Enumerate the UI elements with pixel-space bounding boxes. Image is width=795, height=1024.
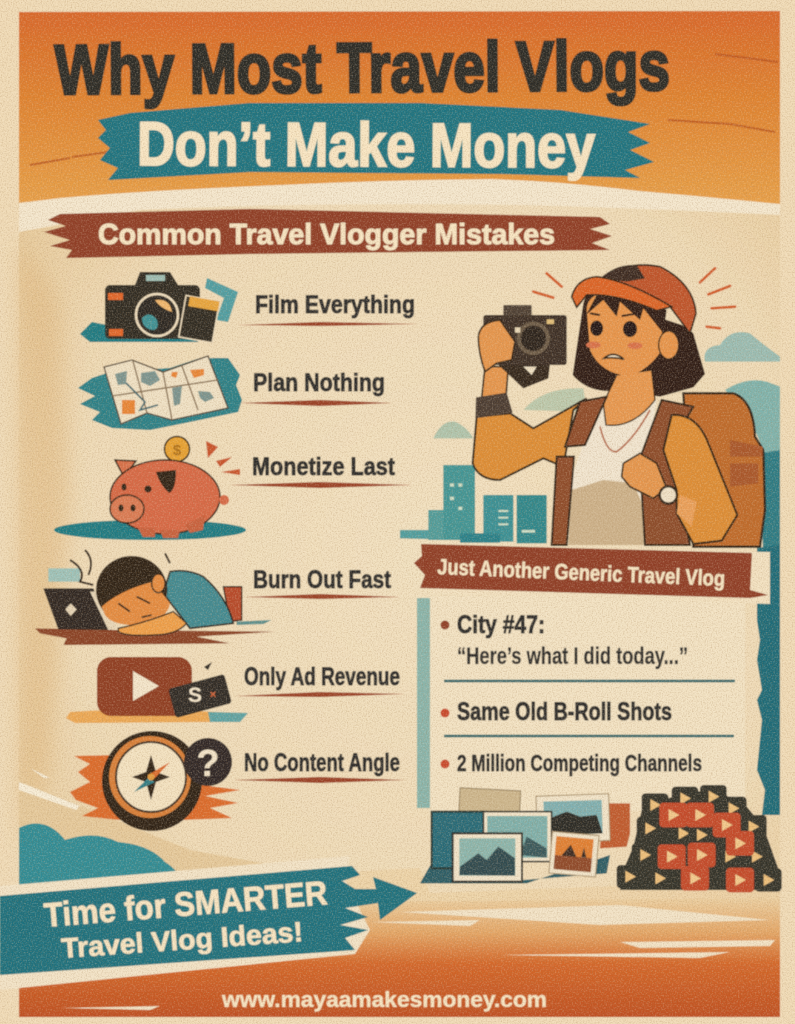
- illustration: frustrated traveler with camera: [400, 265, 780, 560]
- backpack: [683, 393, 765, 547]
- photo and video pile: [420, 785, 782, 892]
- clouds: [433, 332, 780, 560]
- icon: ad revenue play button: ×: [210, 689, 216, 701]
- list item 1: City #47:: [457, 611, 545, 639]
- camera in hand: [483, 305, 567, 388]
- list item 1: [440, 611, 688, 670]
- photo pile: [420, 788, 630, 883]
- burn out fast label: Burn Out Fast: [253, 566, 392, 594]
- underline: [230, 482, 412, 488]
- underline: [245, 594, 400, 599]
- left teal strip of card: [417, 598, 431, 808]
- teal cloud bottom left: [19, 824, 185, 915]
- face: [587, 290, 663, 377]
- generic vlog card: [414, 544, 770, 811]
- right teal strip: [757, 545, 780, 815]
- cta line 1: Time for SMARTER: [43, 874, 329, 935]
- header crack marks: [30, 54, 778, 165]
- underline: [235, 692, 405, 697]
- raised arm sleeve: [473, 398, 587, 480]
- no content angle label: No Content Angle: [244, 749, 400, 777]
- right arm sleeve: [663, 415, 737, 544]
- monetize last label: Monetize Last: [252, 453, 396, 481]
- film everything label: Film Everything: [255, 291, 415, 319]
- icon: piggy bank: [54, 436, 246, 540]
- icon: map: [78, 356, 242, 430]
- title line 2: Don’t Make Money: [137, 110, 596, 181]
- hair back: [573, 293, 705, 397]
- website url: www.mayaamakesmoney.com: [221, 987, 547, 1012]
- forearm: [482, 367, 508, 398]
- watch: [660, 486, 677, 504]
- hand on camera: [478, 320, 515, 372]
- icon: compass with question mark: ?: [196, 743, 220, 785]
- footer gradient: [19, 898, 780, 1017]
- section heading banner: [44, 209, 612, 258]
- ribbon title: Just Another Generic Travel Vlog: [437, 554, 726, 591]
- video tile pile: [617, 785, 782, 892]
- underline: [238, 322, 418, 326]
- plan nothing label: Plan Nothing: [253, 369, 385, 397]
- underline: [240, 400, 392, 406]
- only ad revenue label: Only Ad Revenue: [244, 663, 400, 691]
- shirt: [568, 400, 667, 545]
- cta line 2: Travel Vlog Ideas!: [60, 916, 304, 964]
- underline: [234, 777, 405, 783]
- list item 3: 2 Million Competing Channels: [457, 750, 702, 776]
- icon: ad revenue play button: S: [188, 684, 202, 707]
- inner aged panel: [19, 190, 780, 990]
- teal brush banner: [98, 103, 654, 180]
- section heading banner: Common Travel Vlogger Mistakes: [98, 219, 555, 251]
- cityscape: [400, 465, 547, 543]
- icon: compass with question mark: [70, 731, 240, 831]
- straps: [552, 397, 607, 545]
- title line 1: Why Most Travel Vlogs: [55, 27, 670, 109]
- sparks: [533, 268, 735, 328]
- icon: ad revenue play button: [66, 657, 248, 723]
- tan ground: [190, 868, 780, 905]
- header orange panel: [19, 11, 780, 204]
- icon: camera: [80, 272, 238, 343]
- cap: [600, 265, 696, 333]
- ribbon backing: [425, 545, 770, 604]
- cream streaks: [60, 905, 775, 1010]
- gripping hand: [622, 453, 667, 498]
- icon: burned out vlogger: [35, 550, 275, 645]
- call-to-action arrow banner: [0, 856, 417, 990]
- ribbon: [414, 544, 768, 598]
- icon: piggy bank: $: [173, 442, 182, 459]
- list item 1: “Here’s what I did today...”: [457, 643, 688, 670]
- cream brush under header: [19, 179, 780, 232]
- left tan staining: [19, 240, 70, 850]
- bottom left torn paper: [19, 768, 300, 900]
- list item 2: Same Old B-Roll Shots: [457, 698, 672, 726]
- neck: [603, 370, 655, 425]
